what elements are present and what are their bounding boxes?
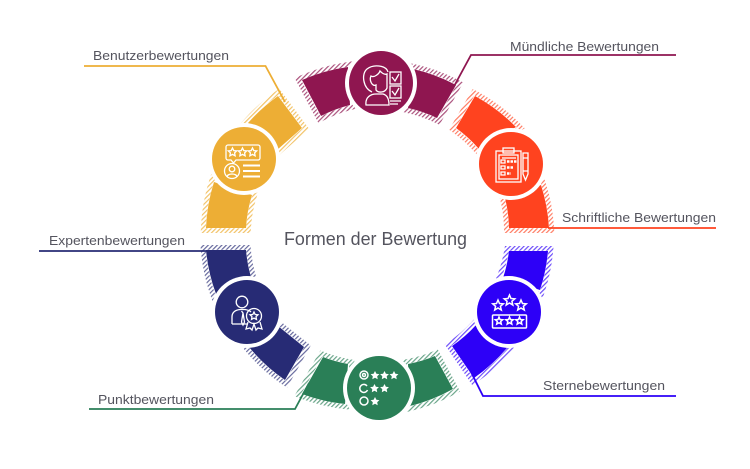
label: Punktbewertungen: Punktbewertungen	[98, 392, 214, 407]
leader line: Mündliche Bewertungen	[452, 55, 676, 90]
leader line: Benutzerbewertungen	[84, 66, 285, 102]
label: Schriftliche Bewertungen: Schriftliche Bewertungen	[562, 210, 716, 225]
label: Mündliche Bewertungen: Mündliche Bewertungen	[510, 39, 659, 54]
icon: Schriftliche Bewertungen, clipboard and pen	[475, 128, 547, 200]
leader line: Schriftliche Bewertungen	[548, 227, 716, 229]
segment: Schriftliche Bewertungen	[456, 96, 549, 228]
segment: Punktbewertungen	[302, 356, 453, 406]
icon: Expertenbewertungen, expert with rosette	[211, 276, 283, 348]
leader line: Punktbewertungen	[89, 383, 309, 409]
label: Expertenbewertungen: Expertenbewertungen	[49, 233, 185, 248]
segment: Benutzerbewertungen	[206, 96, 302, 228]
label: Benutzerbewertungen: Benutzerbewertungen	[93, 48, 229, 63]
icon: Sternebewertungen, stars	[473, 276, 545, 348]
segment: Expertenbewertungen	[206, 250, 304, 380]
label: Sternebewertungen: Sternebewertungen	[543, 378, 665, 393]
icon: Mündliche Bewertungen, person with checklist	[345, 47, 417, 119]
leader line: Expertenbewertungen	[39, 250, 207, 252]
segment: Mündliche Bewertungen	[302, 67, 456, 118]
leader line: Sternebewertungen	[470, 370, 676, 396]
icon: Benutzerbewertungen, user with review bubble	[208, 123, 280, 195]
icon: Punktbewertungen, dots and stars	[343, 352, 415, 424]
title: Formen der Bewertung	[284, 229, 467, 249]
segment: Sternebewertungen	[452, 251, 548, 378]
